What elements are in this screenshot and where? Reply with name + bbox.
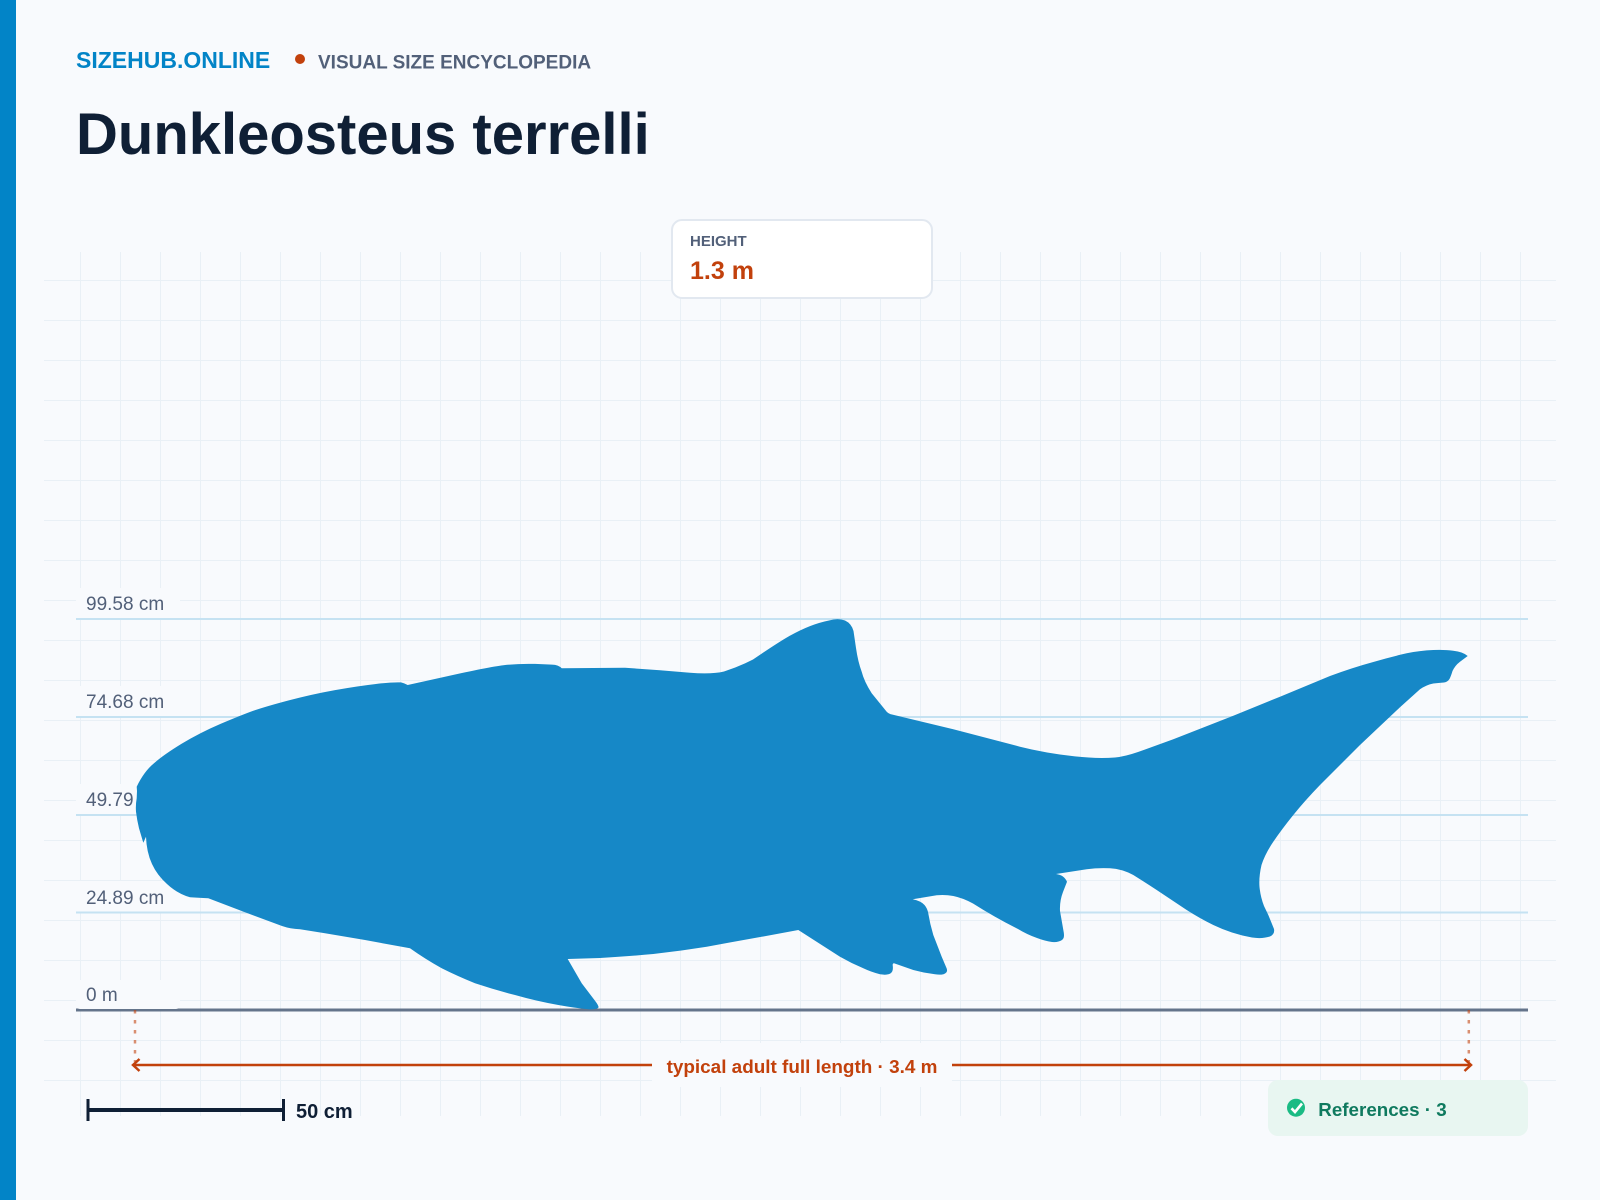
height card [672,220,932,298]
label: 99.58 cm: 99.58 cm [86,594,164,615]
zero label: 0 m [86,985,118,1006]
references text: References · 3 [1318,1099,1447,1120]
height label: HEIGHT [690,233,747,250]
title: Dunkleosteus terrelli [76,102,650,167]
scale bar [88,1099,353,1123]
length guides [135,1010,1469,1062]
brand dot [295,54,305,64]
scale label: 50 cm [296,1101,353,1123]
length label: typical adult full length · 3.4 m [667,1057,937,1078]
zero label [76,980,180,1009]
dunkleosteus silhouette [136,619,1468,1009]
tagline: VISUAL SIZE ENCYCLOPEDIA [318,52,591,74]
label: 24.89 cm: 24.89 cm [86,888,164,909]
ground line [76,1008,1528,1012]
brand name: SIZEHUB.ONLINE [76,47,270,73]
height reference lines [76,588,1528,912]
brand header [76,47,591,74]
label: 49.79 cm: 49.79 cm [86,790,164,811]
height value: 1.3 m [690,257,754,285]
length arrow [133,1043,1471,1087]
label: 74.68 cm: 74.68 cm [86,692,164,713]
icon: check [1287,1099,1305,1117]
references badge [1268,1080,1528,1136]
left accent bar [0,0,16,1200]
